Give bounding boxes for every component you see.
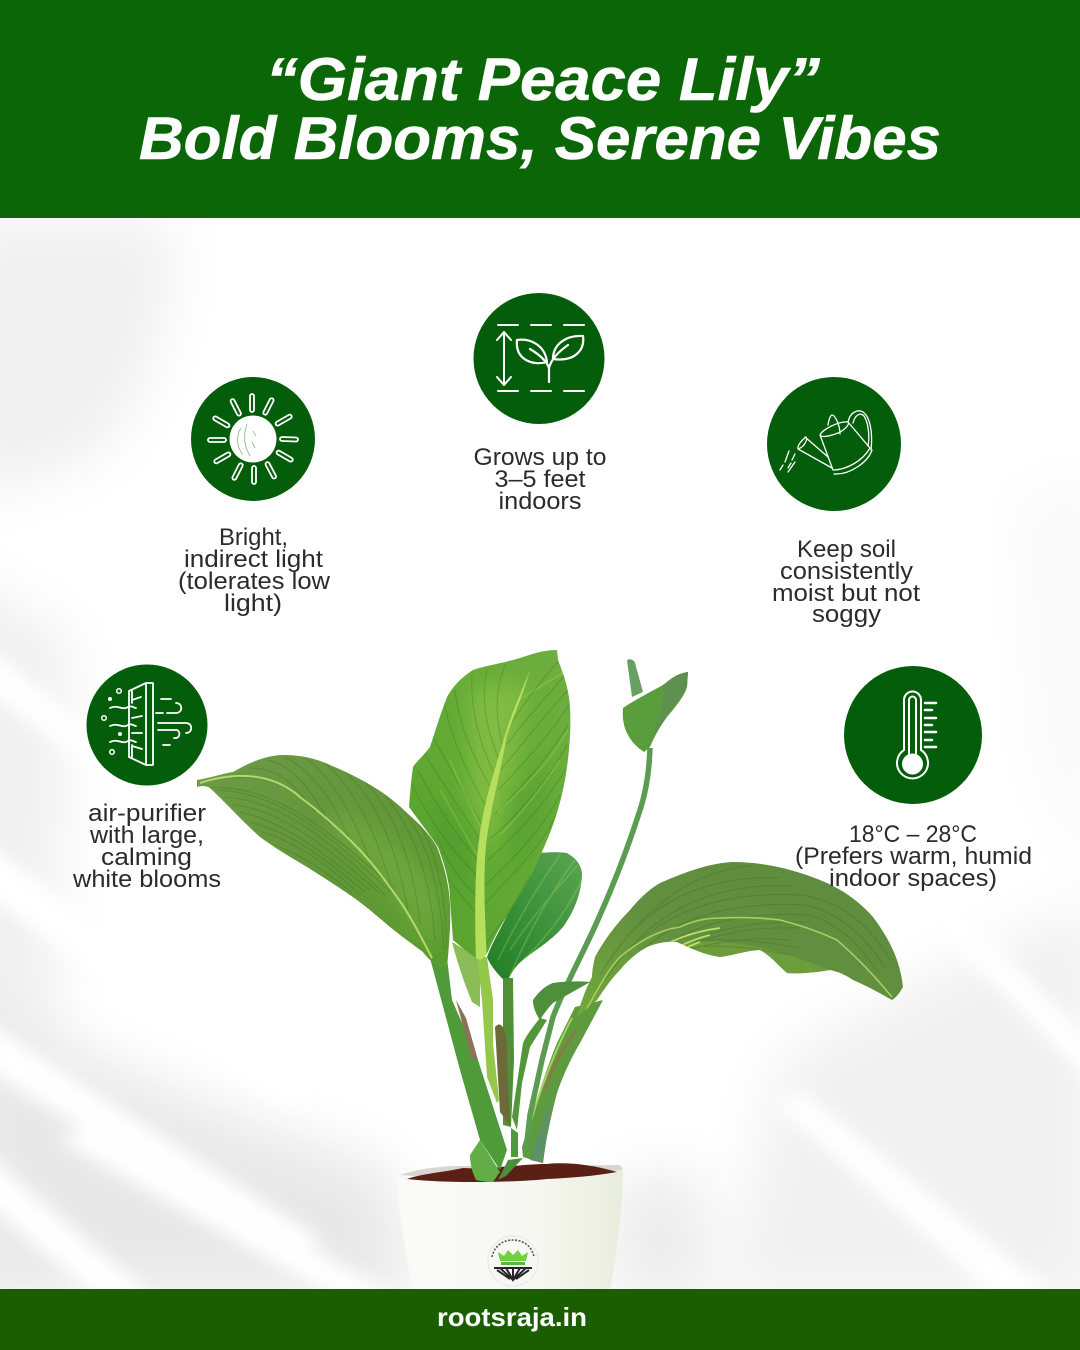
icon: sun bbox=[191, 377, 315, 501]
plant: small lower leaf bbox=[533, 981, 590, 1020]
label: air purification: calming bbox=[101, 844, 192, 871]
plant: right leaf bbox=[577, 862, 903, 1017]
plant: flower stalk and spathe bbox=[526, 659, 688, 1150]
label: watering: moist but not bbox=[772, 580, 920, 607]
label: watering: Keep soil bbox=[797, 536, 896, 563]
icon: watering can bbox=[767, 377, 901, 511]
label: watering bbox=[772, 536, 920, 628]
label: air purification: with large, bbox=[89, 822, 204, 849]
label: light: Bright, bbox=[219, 524, 288, 551]
footer bar bbox=[0, 1289, 1080, 1350]
label: temperature: indoor spaces) bbox=[829, 865, 997, 892]
icon: thermometer bbox=[844, 666, 982, 804]
icon: air filter bbox=[86, 664, 208, 786]
label: air purification: white blooms bbox=[72, 866, 221, 893]
label: air purification: air-purifier bbox=[88, 800, 206, 827]
header banner bbox=[0, 0, 1080, 218]
feature: air purification bbox=[72, 664, 221, 893]
label: height: indoors bbox=[498, 488, 582, 515]
label: temperature: 18°C – 28°C bbox=[849, 821, 977, 848]
label: air purification bbox=[72, 800, 221, 893]
plant: central leaf bbox=[409, 650, 570, 962]
plant: back leaf bbox=[487, 852, 582, 983]
label: height bbox=[474, 444, 606, 515]
plant: left leaf bbox=[197, 755, 450, 968]
label: height: Grows up to bbox=[474, 444, 606, 471]
plant pot with soil and badge bbox=[397, 1163, 623, 1290]
website: rootsraja.in bbox=[437, 1302, 587, 1332]
label: watering: soggy bbox=[812, 601, 881, 628]
label: watering: consistently bbox=[780, 558, 913, 585]
feature: temperature bbox=[795, 666, 1032, 892]
title: “Giant Peace Lily” bbox=[266, 46, 820, 113]
title bbox=[139, 46, 941, 172]
label: height: 3–5 feet bbox=[494, 466, 586, 493]
feature: height bbox=[474, 293, 606, 515]
label: light: indirect light bbox=[184, 546, 323, 573]
label: light: light) bbox=[224, 590, 282, 617]
label: light bbox=[178, 524, 331, 617]
feature: watering bbox=[767, 377, 920, 628]
label: temperature: (Prefers warm, humid bbox=[795, 843, 1032, 870]
pot logo badge bbox=[488, 1236, 538, 1286]
icon: plant height bbox=[474, 293, 604, 424]
feature: light bbox=[178, 377, 331, 617]
label: temperature bbox=[795, 821, 1032, 892]
title: Bold Blooms, Serene Vibes bbox=[139, 105, 941, 172]
plant: stems and base bbox=[430, 942, 603, 1182]
label: light: (tolerates low bbox=[178, 568, 331, 595]
